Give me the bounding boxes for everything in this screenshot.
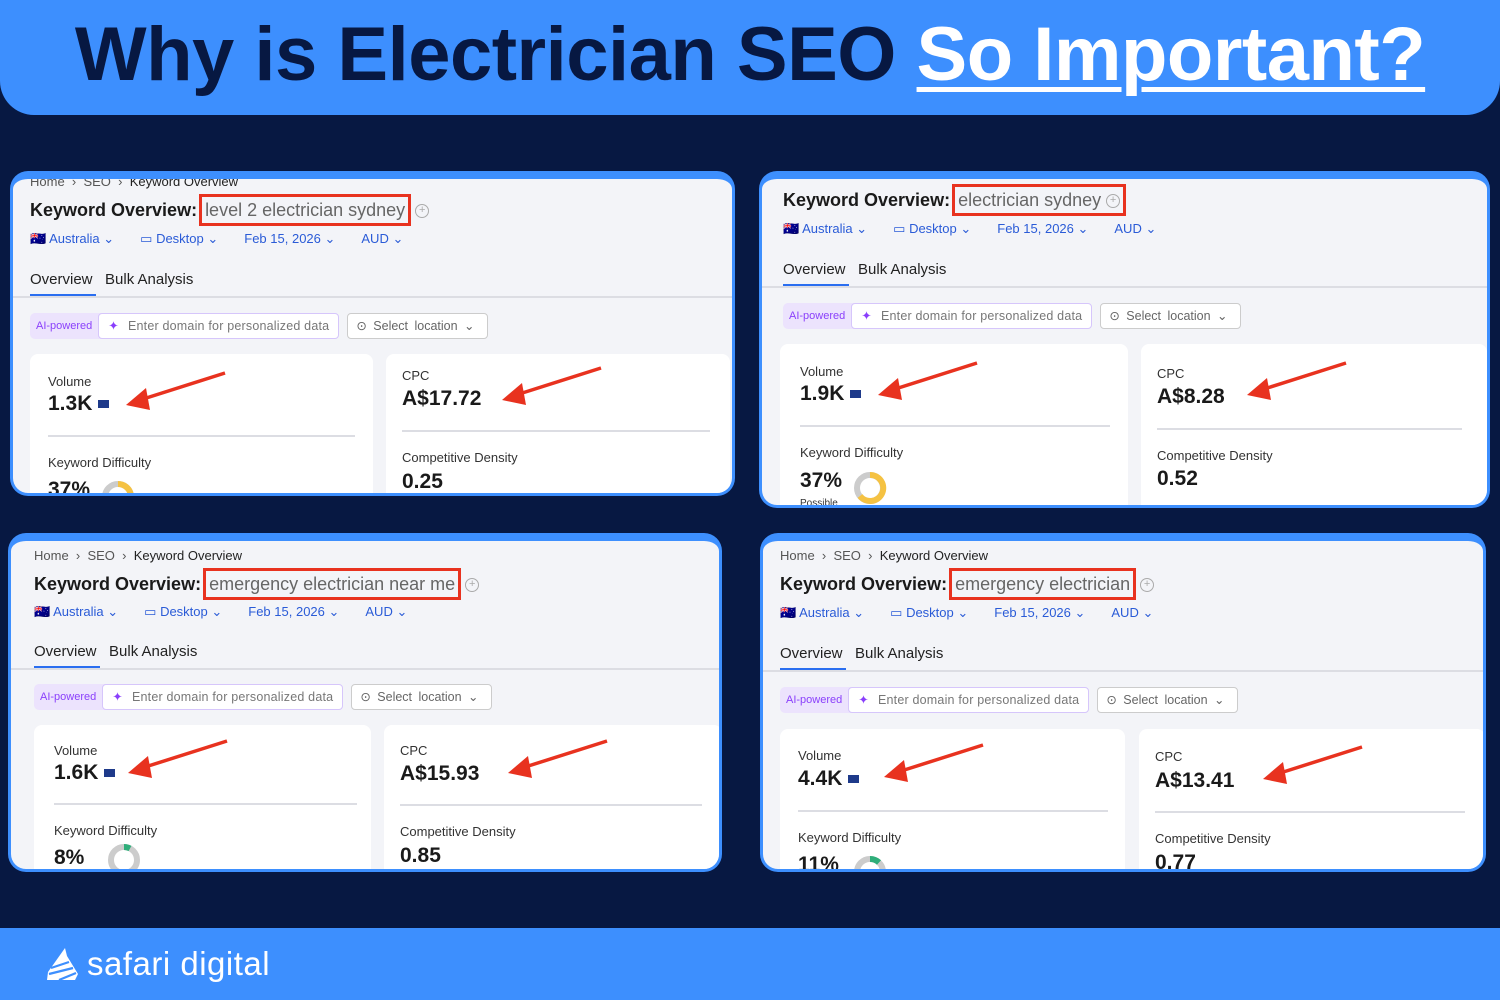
keyword heading: electrician sydney <box>958 190 1101 210</box>
card: volume: 1.6K <box>54 761 98 784</box>
keyword heading: Keyword Overview: <box>780 574 947 594</box>
card: cpc: A$17.72 <box>402 387 481 410</box>
panel: level 2 electrician sydney: ✦ Enter domain for personalized data <box>108 319 329 333</box>
arrow <box>508 739 608 778</box>
keyword heading: + <box>419 204 425 216</box>
keyword heading: level 2 electrician sydney <box>205 200 405 220</box>
panel: level 2 electrician sydney: Home › SEO › Keyword Overview <box>30 174 238 189</box>
keyword heading: + <box>469 578 475 590</box>
panel: level 2 electrician sydney: Overview Bulk Analysis <box>30 271 193 288</box>
arrow <box>884 743 984 782</box>
card: volume: Volume <box>48 374 91 389</box>
card: cpc: CPC <box>402 368 429 383</box>
card: volume: 1.3K <box>48 392 92 415</box>
panel: electrician sydney: ✦ Enter domain for personalized data <box>861 309 1082 323</box>
icon: zebra <box>47 948 78 980</box>
card: volume: Keyword Difficulty <box>48 455 151 470</box>
panel: electrician sydney <box>759 171 1490 508</box>
card: volume <box>780 344 1128 544</box>
panel: emergency electrician near me: 🇦🇺 Australia ⌄ ▭ Desktop ⌄ Feb 15, 2026 ⌄ AUD ⌄ <box>34 604 407 619</box>
arrow <box>1263 745 1362 784</box>
card: cpc: 0.85 <box>400 844 441 867</box>
panel: emergency electrician: 🇦🇺 Australia ⌄ ▭ Desktop ⌄ Feb 15, 2026 ⌄ AUD ⌄ <box>780 605 1153 620</box>
card: cpc <box>1141 344 1487 544</box>
panel: electrician sydney: AI-powered <box>789 310 845 322</box>
card: cpc: 0.52 <box>1157 467 1198 490</box>
card: volume: 37% <box>800 469 842 492</box>
card: cpc: CPC <box>400 743 427 758</box>
header banner <box>0 0 1500 115</box>
card: cpc: Competitive Density <box>1155 831 1271 846</box>
keyword heading: emergency electrician near me <box>209 574 455 594</box>
keyword heading: + <box>1144 578 1150 590</box>
card: cpc <box>386 354 730 554</box>
card: cpc: A$15.93 <box>400 762 479 785</box>
card: cpc: A$8.28 <box>1157 385 1225 408</box>
card: volume: 4.4K <box>798 767 842 790</box>
card: cpc: A$13.41 <box>1155 769 1234 792</box>
card: volume: Keyword Difficulty <box>54 823 157 838</box>
card: cpc <box>384 725 722 925</box>
keyword heading: Keyword Overview: <box>783 190 950 210</box>
panel: electrician sydney: 🇦🇺 Australia ⌄ ▭ Desktop ⌄ Feb 15, 2026 ⌄ AUD ⌄ <box>783 221 1156 236</box>
panel: level 2 electrician sydney: 🇦🇺 Australia ⌄ ▭ Desktop ⌄ Feb 15, 2026 ⌄ AUD ⌄ <box>30 231 403 246</box>
card: cpc: CPC <box>1155 749 1182 764</box>
card: cpc <box>1139 729 1485 929</box>
keyword heading <box>783 184 1126 216</box>
keyword heading <box>780 568 1154 600</box>
card: volume: Keyword Difficulty <box>800 445 903 460</box>
card: volume <box>30 354 373 554</box>
panel: emergency electrician <box>760 533 1486 872</box>
arrow <box>502 366 602 405</box>
arrow <box>878 361 978 400</box>
panel: emergency electrician near me: Overview Bulk Analysis <box>34 643 197 660</box>
keyword heading: emergency electrician <box>955 574 1130 594</box>
keyword heading <box>34 568 479 600</box>
panel: emergency electrician near me: AI-powered <box>40 691 96 703</box>
panel: level 2 electrician sydney <box>10 171 735 496</box>
panel: emergency electrician near me: Home › SEO › Keyword Overview <box>34 548 242 563</box>
card: cpc: Competitive Density <box>1157 448 1273 463</box>
panel: emergency electrician near me: ✦ Enter domain for personalized data <box>112 690 333 704</box>
logo <box>47 945 270 982</box>
card: cpc: 0.25 <box>402 470 443 493</box>
footer bar <box>0 928 1500 1000</box>
keyword heading: + <box>1110 194 1116 206</box>
card: cpc: CPC <box>1157 366 1184 381</box>
keyword heading: Keyword Overview: <box>34 574 201 594</box>
panel: electrician sydney: Overview Bulk Analysis <box>783 261 946 278</box>
title: Why is Electrician SEO So Important? <box>75 12 1425 97</box>
card: volume: Volume <box>54 743 97 758</box>
card: cpc: Competitive Density <box>400 824 516 839</box>
arrow <box>128 739 228 778</box>
arrow <box>1247 361 1346 400</box>
panel: emergency electrician near me <box>8 533 722 872</box>
panel: emergency electrician: AI-powered <box>786 694 842 706</box>
arrow <box>126 371 226 410</box>
card: volume: 8% <box>54 846 84 869</box>
card: volume <box>780 729 1125 929</box>
panel: level 2 electrician sydney: AI-powered <box>36 320 92 332</box>
keyword heading: Keyword Overview: <box>30 200 197 220</box>
card: volume: Keyword Difficulty <box>798 830 901 845</box>
panel: emergency electrician: Overview Bulk Analysis <box>780 645 943 662</box>
card: volume <box>34 725 371 925</box>
panel: emergency electrician: Home › SEO › Keyword Overview <box>780 548 988 563</box>
card: cpc: Competitive Density <box>402 450 518 465</box>
panel: emergency electrician near me: ⊙ Select location ⌄ <box>360 690 479 704</box>
panel: electrician sydney: ⊙ Select location ⌄ <box>1109 309 1228 323</box>
card: volume: Volume <box>800 364 843 379</box>
panel: level 2 electrician sydney: ⊙ Select location ⌄ <box>356 319 475 333</box>
keyword heading <box>30 194 429 226</box>
panel: emergency electrician: ✦ Enter domain for personalized data <box>858 693 1079 707</box>
card: volume: 1.9K <box>800 382 844 405</box>
card: volume: Volume <box>798 748 841 763</box>
panel: emergency electrician: ⊙ Select location ⌄ <box>1106 693 1225 707</box>
brand name: safari digital <box>87 945 270 982</box>
